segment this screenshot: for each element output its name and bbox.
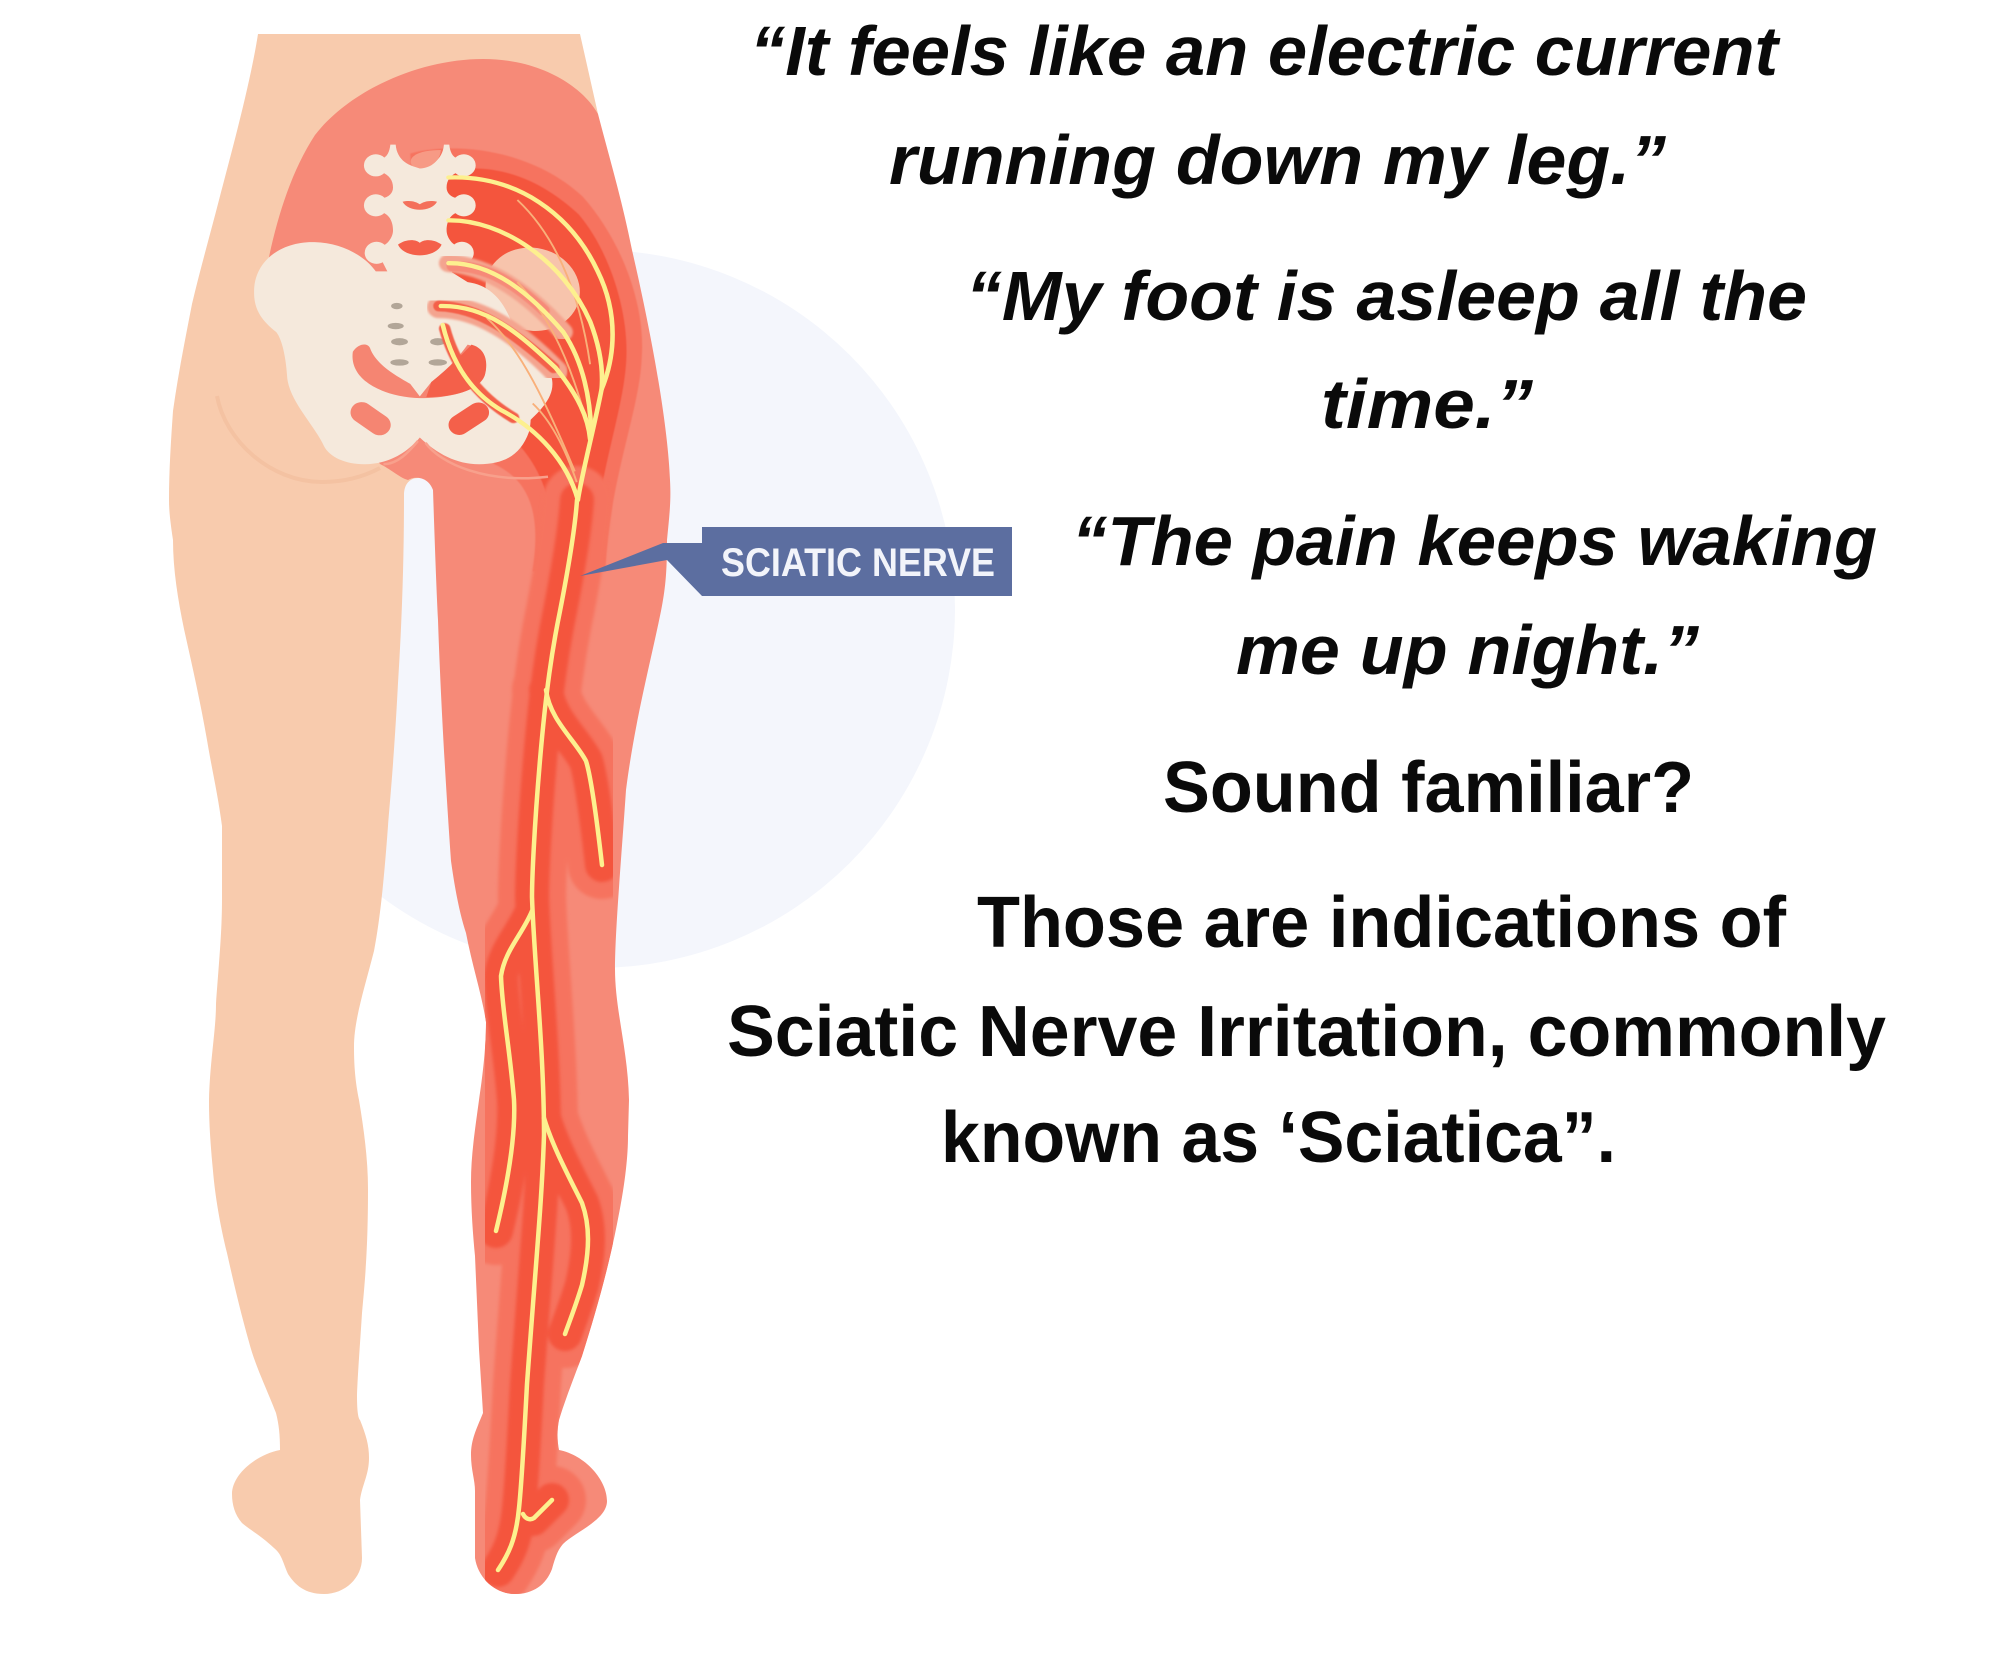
- quote 1: running down my leg.”: [889, 121, 1666, 199]
- glow over sacrum: [439, 307, 556, 371]
- quote 2: [966, 257, 1807, 443]
- right pelvic wing, faded: [471, 233, 595, 345]
- illustration: body with sciatic nerve: [169, 34, 670, 1594]
- quote 2: “My foot is asleep all the: [966, 257, 1807, 335]
- quote 1: [750, 12, 1781, 199]
- quote 3: me up night.”: [1236, 611, 1699, 689]
- crease right: [426, 443, 548, 478]
- callout: sciatic nerve label: SCIATIC NERVE: [721, 541, 995, 585]
- spine processes: [364, 145, 476, 275]
- explanation text: Sciatic Nerve Irritation, commonly: [727, 992, 1886, 1072]
- question heading: Sound familiar?: [1163, 748, 1694, 828]
- background circle: [237, 250, 955, 968]
- pelvis and spine: [254, 145, 595, 478]
- quote 3: [1072, 502, 1877, 689]
- buttock crease: [217, 396, 380, 482]
- left leg: [169, 34, 610, 1594]
- quote 3: “The pain keeps waking: [1072, 502, 1877, 580]
- explanation text: [727, 883, 1886, 1178]
- thin nerve branches: [487, 200, 590, 482]
- right leg and hip: [269, 59, 670, 1594]
- callout: sciatic nerve label: [580, 527, 1012, 596]
- explanation text: Those are indications of: [977, 883, 1787, 963]
- sacrum dashes: [388, 303, 447, 366]
- quote 1: “It feels like an electric current: [750, 12, 1781, 90]
- inflamed glow along nerve: [410, 148, 642, 1570]
- quote 2: time.”: [1321, 365, 1533, 443]
- pelvis left and centre: [254, 242, 531, 464]
- explanation text: known as ‘Sciatica”.: [941, 1098, 1616, 1178]
- sciatic nerve lines: [441, 177, 613, 1570]
- pelvic inlet: [353, 345, 486, 398]
- vertebra holes: [403, 201, 437, 210]
- obturator holes: [362, 412, 380, 425]
